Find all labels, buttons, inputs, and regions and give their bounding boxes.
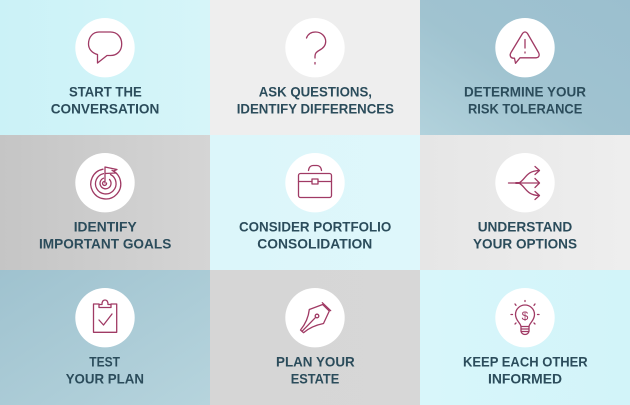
panel: start the conversation (0, 0, 210, 135)
icon: warning triangle (510, 32, 539, 63)
icon: fountain pen nib (300, 303, 331, 333)
panel: plan your estate (210, 270, 420, 405)
heading: plan your estate: PLAN YOUR (276, 354, 355, 370)
heading: start the conversation (51, 84, 159, 116)
heading: understand your options: UNDERSTAND (478, 218, 572, 234)
heading: keep each other informed: KEEP EACH OTHER (463, 354, 588, 370)
heading: ask questions, identify differences (237, 84, 394, 116)
icon: question mark (306, 32, 326, 64)
heading: start the conversation: START THE (69, 84, 142, 100)
heading: keep each other informed (463, 354, 588, 386)
icon: light bulb with dollar sign (511, 300, 539, 334)
heading: determine your risk tolerance: RISK TOLERANCE (468, 100, 582, 116)
heading: identify important goals: IMPORTANT GOALS (39, 236, 171, 252)
heading: identify important goals: IDENTIFY (74, 218, 137, 234)
panel: determine your risk tolerance (420, 0, 630, 135)
heading: plan your estate (276, 354, 355, 386)
panel: understand your options (420, 135, 630, 270)
heading: understand your options (473, 218, 577, 252)
icon: clipboard with check (94, 300, 117, 332)
panel: consider portfolio consolidation (210, 135, 420, 270)
heading: plan your estate: ESTATE (291, 370, 339, 386)
panel: keep each other informed (420, 270, 630, 405)
heading: test your plan: TEST (89, 354, 120, 370)
panel: identify important goals (0, 135, 210, 270)
heading: ask questions, identify differences: ASK QUESTIONS, (259, 84, 372, 100)
heading: start the conversation: CONVERSATION (51, 100, 159, 116)
heading: understand your options: YOUR OPTIONS (473, 236, 577, 252)
heading: test your plan (66, 354, 144, 386)
heading: consider portfolio consolidation: CONSOLIDATION (257, 236, 372, 252)
heading: test your plan: YOUR PLAN (66, 370, 144, 386)
icon: briefcase (298, 166, 332, 198)
heading: consider portfolio consolidation: CONSIDER PORTFOLIO (239, 218, 391, 234)
panel: ask questions (210, 0, 420, 135)
heading: identify important goals (39, 218, 171, 252)
icon: target with flag (91, 167, 121, 199)
icon: light bulb with dollar sign: $ (522, 309, 529, 323)
heading: ask questions, identify differences: IDENTIFY DIFFERENCES (237, 100, 394, 116)
icon: branching arrows (508, 166, 540, 200)
heading: determine your risk tolerance: DETERMINE YOUR (464, 84, 586, 100)
heading: consider portfolio consolidation (239, 218, 391, 252)
panel: test your plan (0, 270, 210, 405)
heading: keep each other informed: INFORMED (488, 370, 562, 386)
icon: speech bubble (88, 32, 122, 63)
heading: determine your risk tolerance (464, 84, 586, 116)
